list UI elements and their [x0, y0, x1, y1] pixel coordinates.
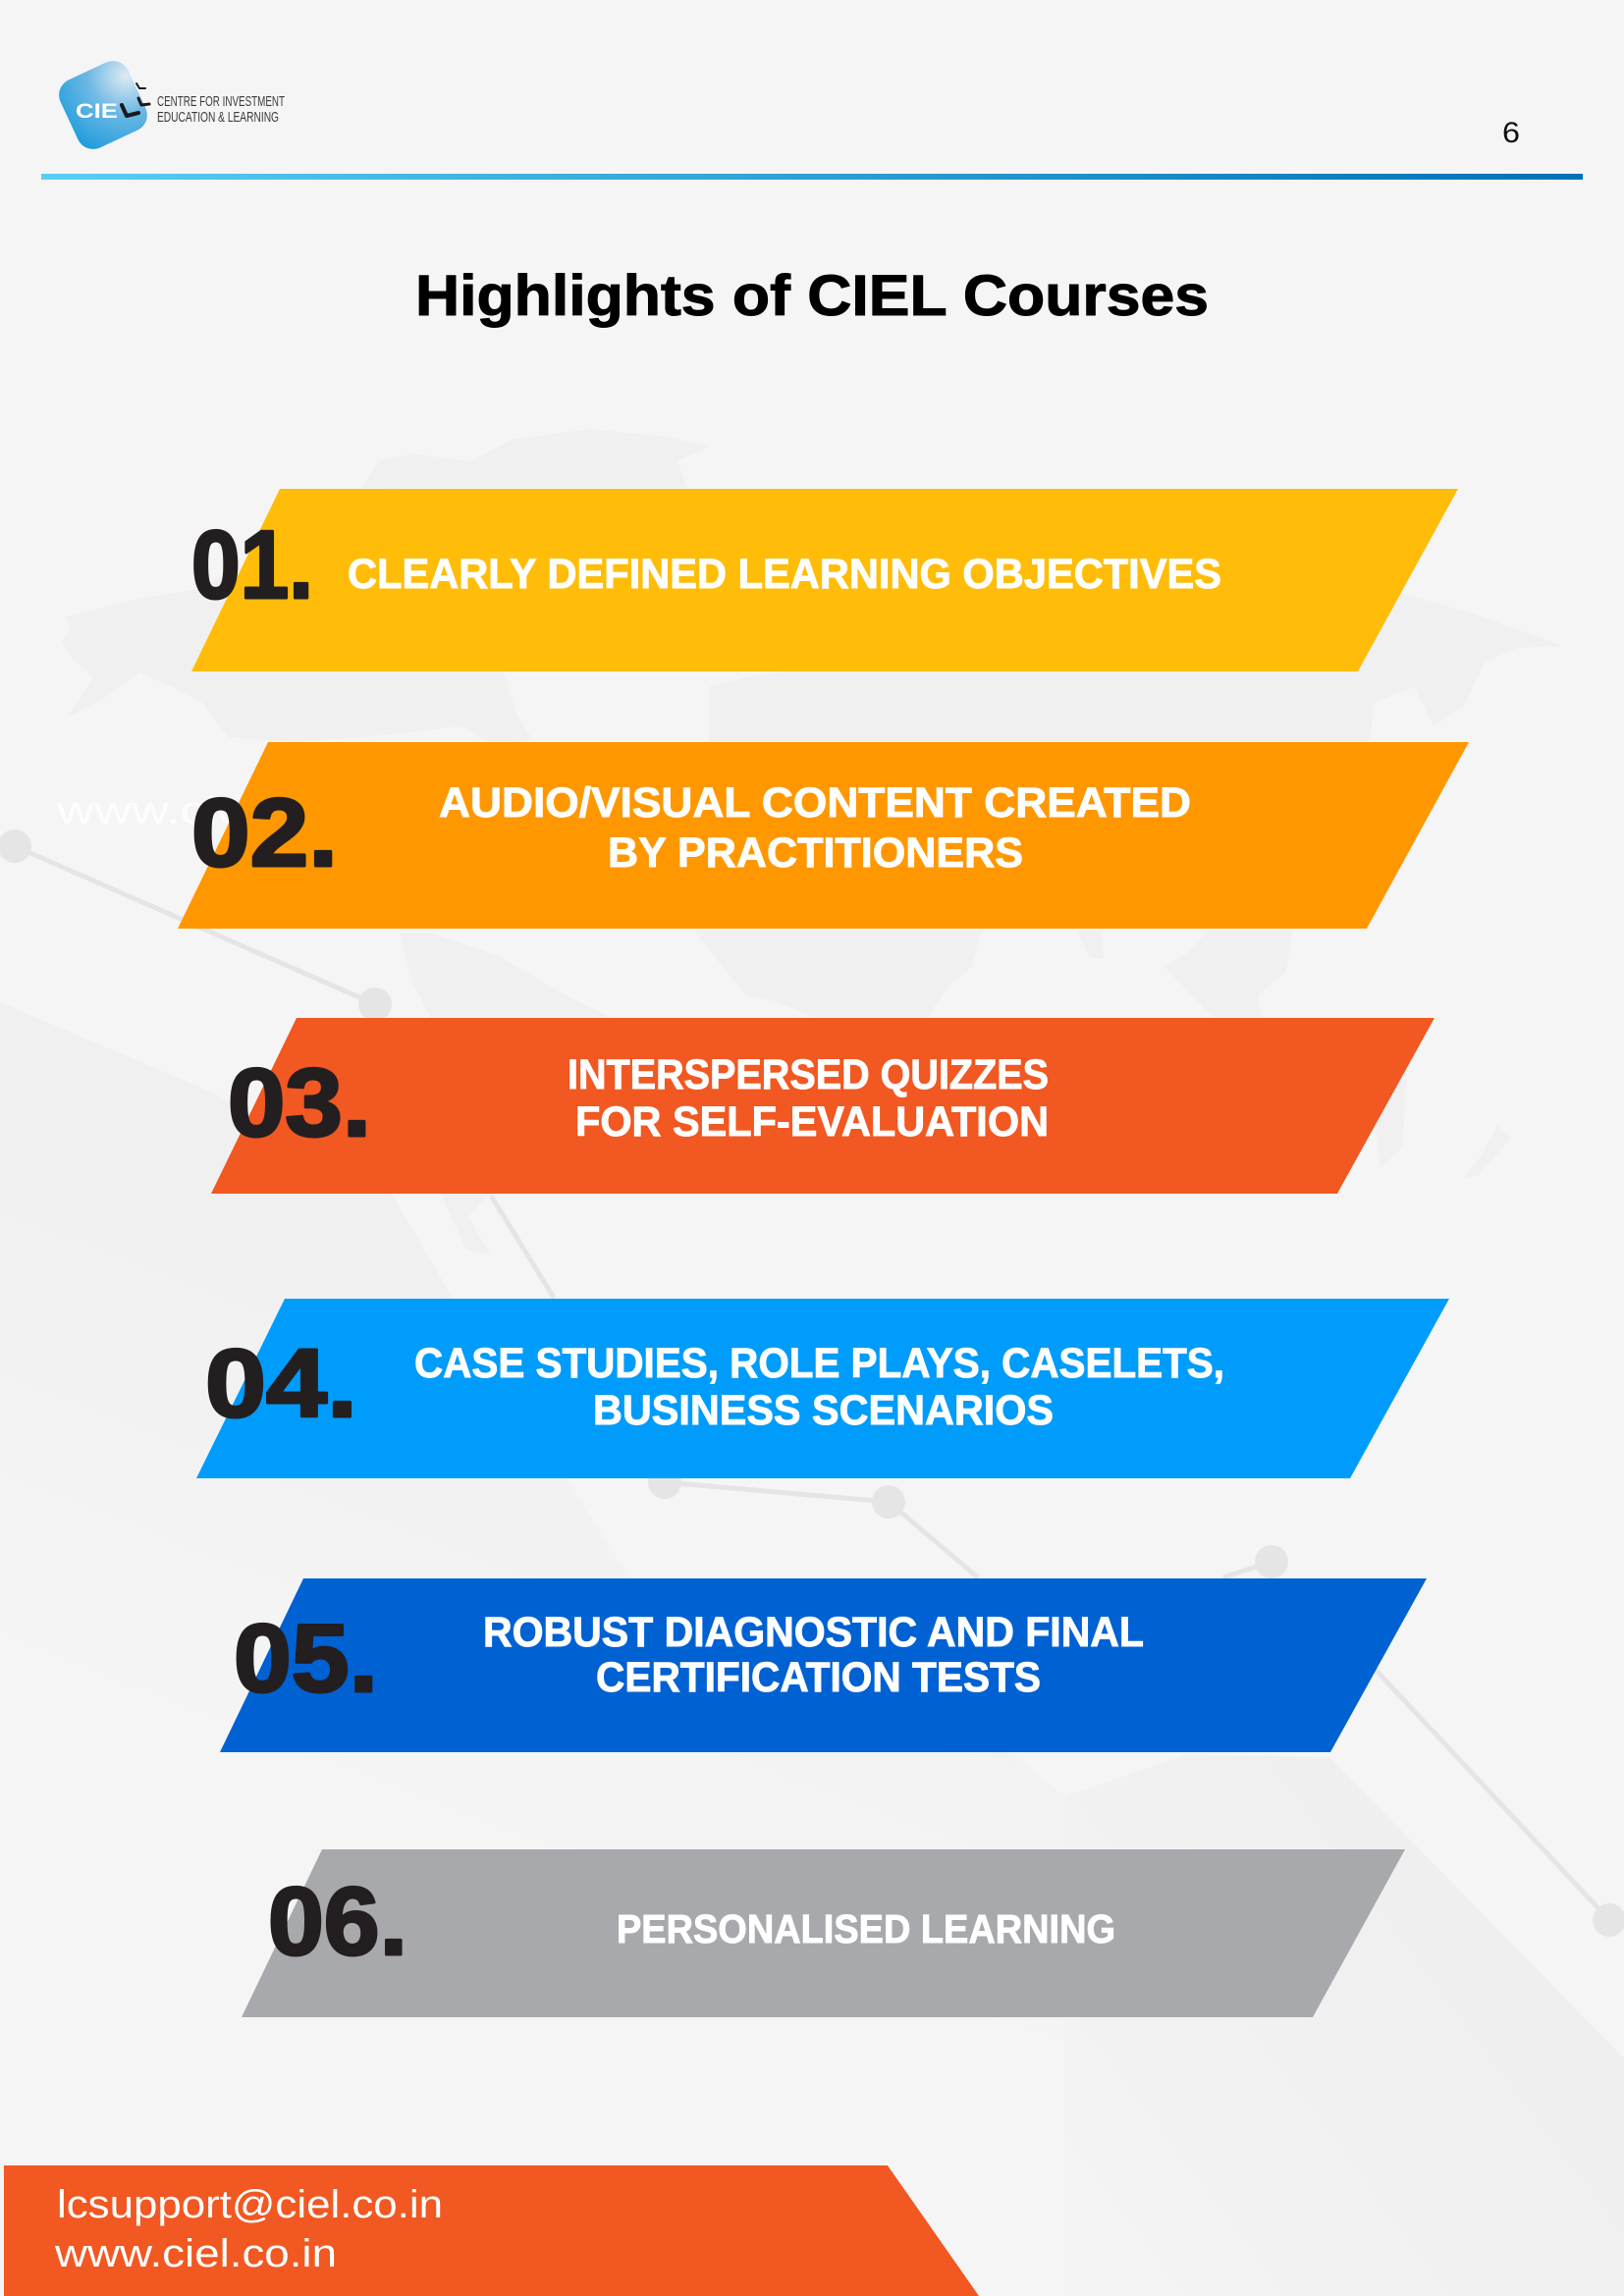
- logo mark: [54, 56, 152, 154]
- text 3: [568, 1051, 1049, 1146]
- text 2: BY PRACTITIONERS: [608, 829, 1023, 877]
- footer email: lcsupport@ciel.co.in: [57, 2183, 443, 2226]
- item 4: case studies: [196, 1299, 1449, 1478]
- banner 5: [220, 1578, 1427, 1752]
- banner 6: [242, 1849, 1405, 2017]
- text 1: CLEARLY DEFINED LEARNING OBJECTIVES: [348, 551, 1221, 598]
- background shaded geometric shapes: [0, 1002, 1624, 2296]
- text 3: FOR SELF-EVALUATION: [575, 1098, 1049, 1146]
- logo wordmark: EDUCATION & LEARNING: [157, 109, 279, 126]
- text 5: CERTIFICATION TESTS: [596, 1654, 1041, 1701]
- banner 2: [178, 742, 1469, 929]
- page number: 6: [1502, 117, 1520, 149]
- number 4: 04.: [205, 1329, 357, 1437]
- banner 1: [191, 489, 1458, 671]
- footer website: www.ciel.co.in: [54, 2232, 337, 2275]
- item 3: quizzes: [211, 1018, 1435, 1194]
- number 2: 02.: [191, 778, 338, 886]
- text 4: [414, 1340, 1224, 1434]
- item 6: personalised learning: [242, 1849, 1405, 2017]
- text 5: ROBUST DIAGNOSTIC AND FINAL: [483, 1609, 1144, 1656]
- background world map: [62, 429, 1563, 1255]
- title: Highlights of CIEL Courses: [415, 264, 1209, 328]
- text 4: BUSINESS SCENARIOS: [593, 1387, 1054, 1434]
- text 3: INTERSPERSED QUIZZES: [568, 1051, 1049, 1098]
- text 4: CASE STUDIES, ROLE PLAYS, CASELETS,: [414, 1340, 1224, 1387]
- faint watermark url: www.ciel.co.in: [56, 789, 381, 832]
- header rule: [41, 174, 1583, 180]
- number 3: 03.: [228, 1048, 371, 1156]
- banner 3: [211, 1018, 1435, 1194]
- number 6: 06.: [268, 1867, 407, 1975]
- item 1: learning objectives: [191, 489, 1458, 671]
- banner 4: [196, 1299, 1449, 1478]
- item 5: diagnostic tests: [220, 1578, 1427, 1752]
- logo: CIEL: [54, 56, 285, 154]
- text 2: [439, 779, 1191, 877]
- text 5: [483, 1609, 1144, 1701]
- text 6: PERSONALISED LEARNING: [617, 1906, 1115, 1951]
- footer contact panel: [4, 2165, 979, 2296]
- text 2: AUDIO/VISUAL CONTENT CREATED: [439, 779, 1191, 827]
- number 1: 01.: [191, 510, 313, 618]
- number 5: 05.: [234, 1604, 378, 1712]
- logo letters: CIE: [76, 100, 118, 123]
- footer shape: [4, 2165, 979, 2296]
- logo wordmark: [157, 93, 285, 126]
- logo wordmark: CENTRE FOR INVESTMENT: [157, 93, 285, 110]
- item 2: audio/visual content: [178, 742, 1469, 929]
- logo bird marks: [122, 83, 149, 116]
- background network line graph: [0, 829, 1624, 1937]
